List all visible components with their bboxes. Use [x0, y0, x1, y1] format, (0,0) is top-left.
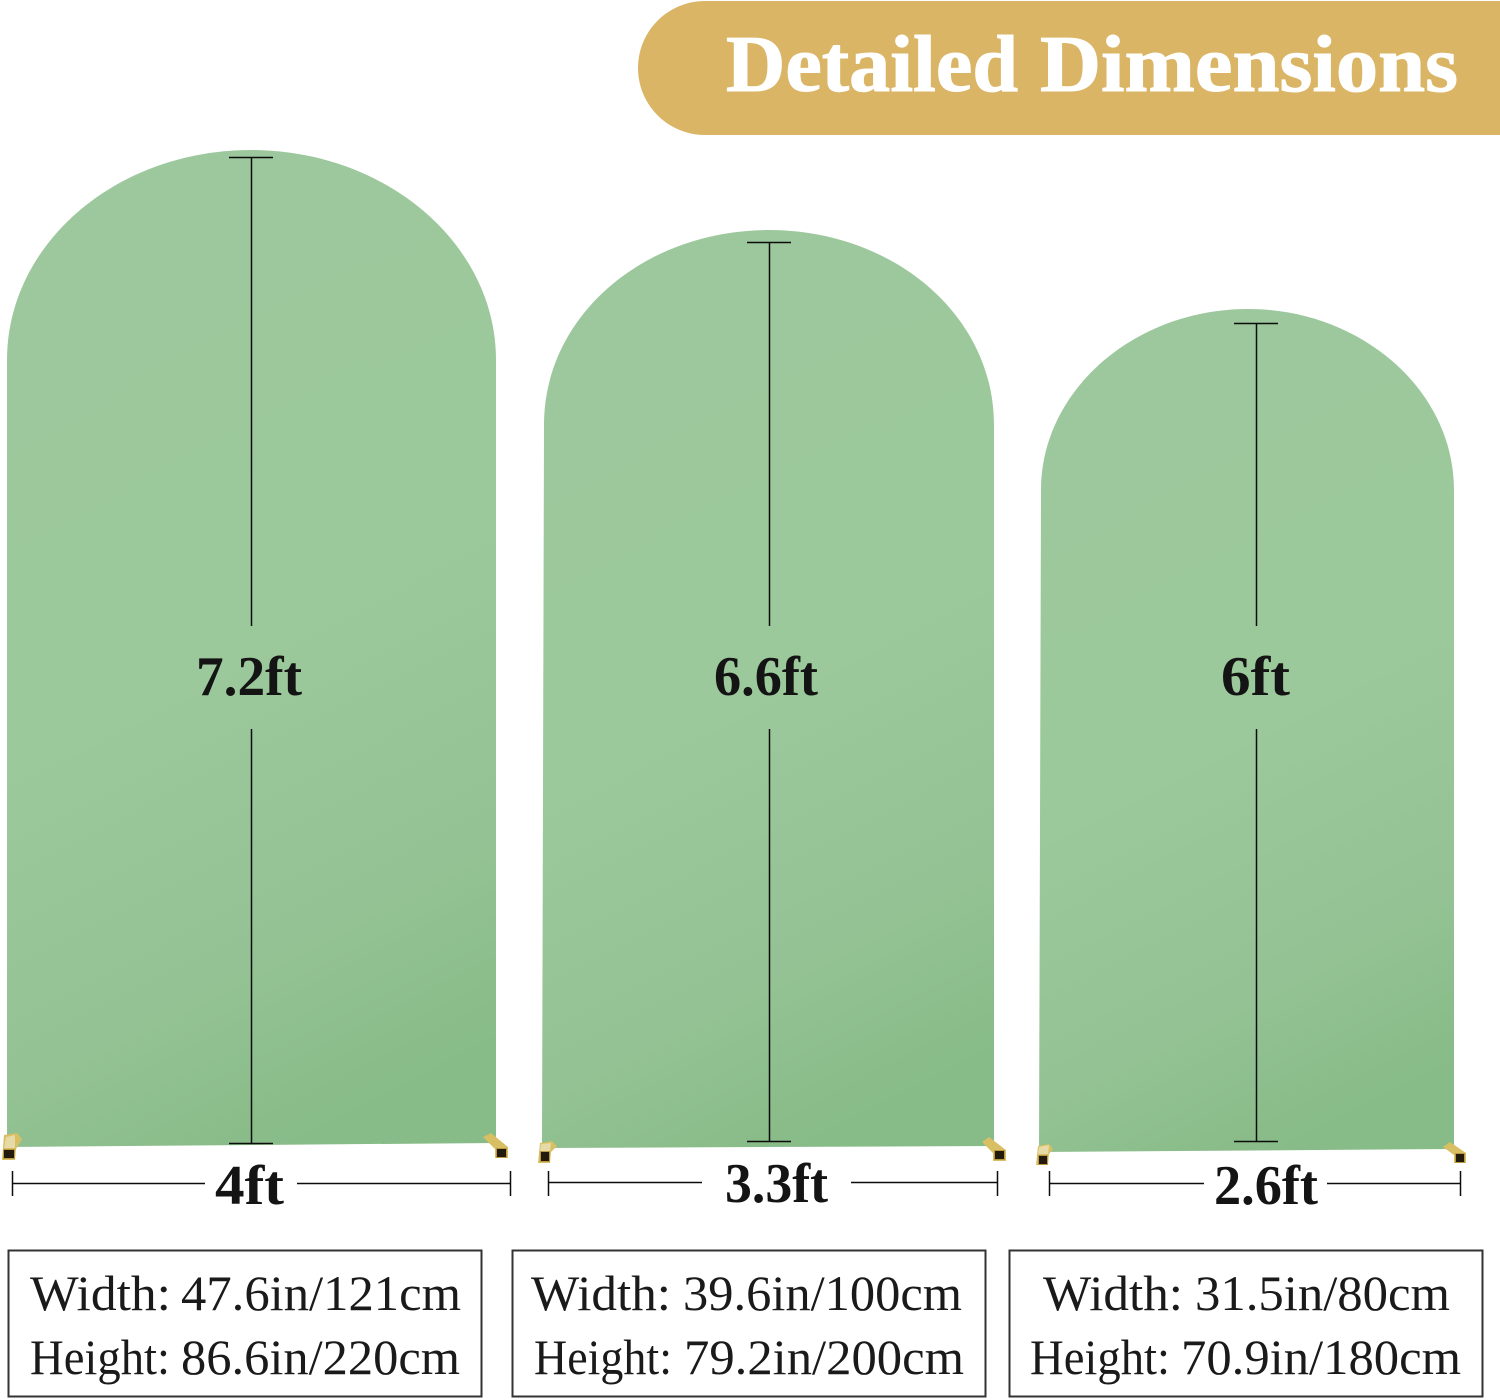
panel: small spec box — [1010, 1250, 1482, 1396]
icon: left foot — [1036, 1144, 1053, 1165]
width spec: 47.6in/121cm — [181, 1265, 461, 1321]
height line — [747, 242, 791, 1142]
title text: Dimensions — [1040, 21, 1458, 109]
width spec: 31.5in/80cm — [1195, 1265, 1450, 1321]
title banner — [638, 1, 1500, 135]
width spec — [30, 1265, 461, 1321]
height spec — [30, 1329, 460, 1385]
panel: large arch — [2, 150, 510, 1217]
icon: left foot — [2, 1133, 22, 1160]
arch shape — [542, 230, 994, 1148]
height spec: Height: — [1030, 1329, 1170, 1385]
width label: 3.3ft — [725, 1153, 828, 1215]
title text — [726, 21, 1458, 109]
height spec: 79.2in/200cm — [684, 1329, 964, 1385]
width spec — [1043, 1265, 1450, 1321]
arch shape — [1039, 309, 1454, 1152]
height spec: Height: — [30, 1329, 170, 1385]
width line — [1049, 1171, 1460, 1196]
panel: large spec box — [8, 1250, 482, 1396]
width label: 2.6ft — [1214, 1155, 1318, 1217]
icon: right foot — [1443, 1142, 1466, 1163]
title text: Detailed — [726, 21, 1018, 109]
width spec: Width: — [1043, 1265, 1183, 1321]
height spec: 70.9in/180cm — [1181, 1329, 1461, 1385]
height label: 6ft — [1221, 646, 1290, 708]
panel: medium spec box — [512, 1250, 986, 1396]
icon: right foot — [982, 1137, 1006, 1161]
width line — [548, 1171, 998, 1196]
height spec: 86.6in/220cm — [181, 1329, 460, 1385]
height label: 7.2ft — [196, 646, 302, 708]
width spec — [531, 1265, 962, 1321]
height spec: Height: — [534, 1329, 672, 1385]
panel: small arch — [1036, 309, 1466, 1217]
icon: left foot — [538, 1141, 557, 1163]
width spec: Width: — [531, 1265, 671, 1321]
icon: right foot — [483, 1133, 508, 1158]
height line — [229, 157, 273, 1144]
width spec: Width: — [30, 1265, 171, 1321]
width label: 4ft — [215, 1155, 284, 1217]
width line — [12, 1171, 510, 1196]
height spec — [1030, 1329, 1461, 1385]
height line — [1234, 323, 1278, 1142]
height label: 6.6ft — [714, 646, 818, 708]
panel: medium arch — [538, 230, 1006, 1215]
arch shape — [7, 150, 496, 1147]
height spec — [534, 1329, 964, 1385]
width spec: 39.6in/100cm — [683, 1265, 962, 1321]
